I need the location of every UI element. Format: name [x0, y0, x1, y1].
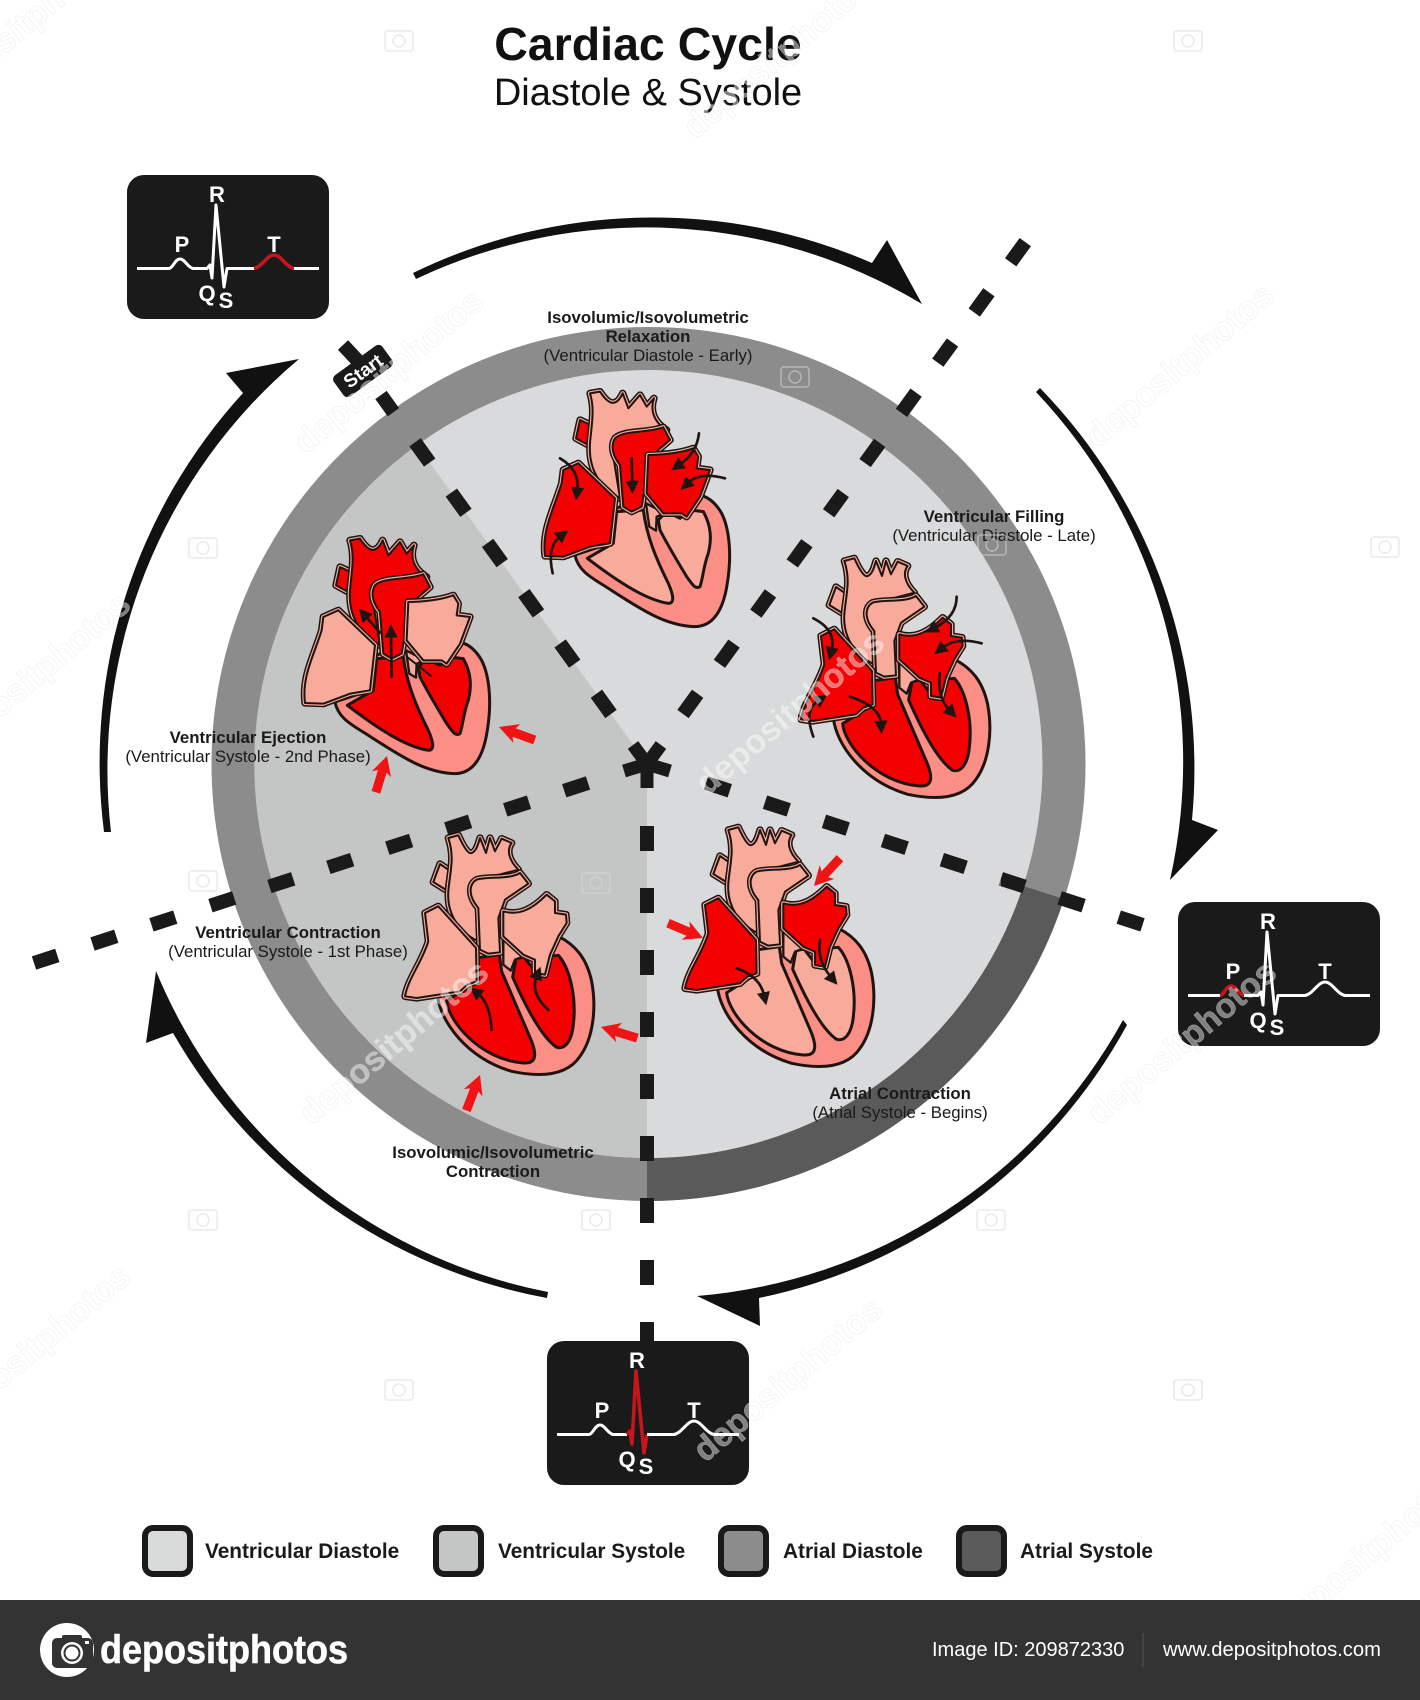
label: atrial contraction: Atrial Contraction: [829, 1084, 971, 1103]
footer logo text: depositphotos: [100, 1628, 348, 1672]
ECG panel: T wave highlighted: [127, 175, 329, 319]
legend: ventricular diastole: [145, 1528, 399, 1574]
icon: camera logo: [40, 1623, 94, 1677]
ECG panel: P wave highlighted: T: [1318, 959, 1332, 984]
dashed spokes: [34, 237, 1143, 1346]
label: atrial contraction: [812, 1084, 988, 1122]
ECG panel: P wave highlighted: S: [1270, 1015, 1284, 1040]
label: isovolumic relaxation: Isovolumic/Isovolumetric: [547, 308, 749, 327]
label: ventricular contraction: (Ventricular Systole - 1st Phase): [168, 942, 408, 961]
red arrow: [598, 1017, 640, 1048]
ECG panel: QRS highlighted: S: [639, 1454, 653, 1479]
inner sector: ventricular systole: [254, 445, 647, 1158]
footer bar: [0, 1600, 1420, 1700]
watermarks: depositphotos: [1080, 953, 1284, 1132]
heart: isovolumic relaxation: [544, 392, 730, 627]
label: ventricular filling: [892, 507, 1096, 545]
red arrow: [457, 1071, 489, 1114]
title: [494, 18, 802, 114]
label: ventricular ejection: Ventricular Ejection: [170, 728, 326, 747]
legend: atrial systole: Atrial Systole: [1020, 1540, 1153, 1563]
label: ventricular filling: (Ventricular Diastole - Late): [892, 526, 1096, 545]
watermarks: depositphotos: [287, 282, 491, 461]
website: www.depositphotos.com: [1162, 1639, 1381, 1661]
label: isovolumic contraction: Contraction: [446, 1162, 540, 1181]
legend: [145, 1528, 1153, 1574]
inner disc: ventricular diastole: [254, 370, 1042, 1158]
ECG panel: P wave highlighted: [1178, 902, 1380, 1046]
red arrow: [664, 914, 707, 947]
watermark cameras: [189, 31, 1399, 1400]
label: isovolumic contraction: [392, 1143, 594, 1181]
title: Cardiac Cycle: [494, 18, 802, 70]
label: ventricular contraction: [168, 923, 408, 961]
outer ring: atrial systole: [647, 886, 1064, 1201]
circular arrow: left: [100, 359, 299, 832]
red arrow: [496, 718, 538, 749]
label: ventricular ejection: [125, 728, 371, 766]
outer ring: atrial diastole: [212, 327, 1086, 1201]
legend: ventricular systole: Ventricular Systole: [498, 1540, 685, 1563]
legend: atrial systole: [959, 1528, 1153, 1574]
ECG panel: QRS highlighted: T: [687, 1398, 701, 1423]
ECG panel: T wave highlighted: Q: [198, 281, 216, 306]
circular arrow: right: [1036, 388, 1218, 880]
ECG panel: QRS highlighted: P: [595, 1398, 609, 1423]
label: ventricular filling: Ventricular Filling: [924, 507, 1064, 526]
heart: atrial contraction: [664, 827, 874, 1067]
legend: atrial diastole: Atrial Diastole: [783, 1540, 923, 1563]
label: isovolumic relaxation: [544, 308, 752, 365]
ECG panel: QRS highlighted: Q: [618, 1447, 636, 1472]
ECG panel: P wave highlighted: P: [1226, 959, 1240, 984]
ECG panel: T wave highlighted: R: [209, 182, 225, 207]
red arrow: [807, 851, 847, 893]
label: isovolumic relaxation: (Ventricular Diastole - Early): [544, 346, 752, 365]
label: isovolumic contraction: Isovolumic/Isovolumetric: [392, 1143, 594, 1162]
label: isovolumic relaxation: Relaxation: [606, 327, 690, 346]
ECG panel: P wave highlighted: R: [1260, 909, 1276, 934]
watermarks: depositphotos: [292, 953, 496, 1132]
title: Diastole & Systole: [494, 72, 802, 114]
red arrow: [366, 753, 397, 795]
start tag: [331, 343, 395, 399]
circular arrow: bottom left: [146, 971, 548, 1298]
heart: ventricular ejection: [304, 539, 538, 795]
ECG panel: QRS highlighted: R: [629, 1348, 645, 1373]
ECG panel: T wave highlighted: T: [267, 232, 281, 257]
label: atrial contraction: (Atrial Systole - Begins): [812, 1103, 988, 1122]
legend: atrial diastole: [721, 1528, 923, 1574]
cycle disc: [212, 327, 1086, 1201]
heart: ventricular filling: [801, 558, 990, 798]
watermarks: depositphotos: [688, 623, 892, 802]
image id: Image ID: 209872330: [932, 1639, 1124, 1661]
circular arrow: bottom right: [697, 1020, 1127, 1326]
ECG panel: T wave highlighted: S: [219, 288, 233, 313]
ECG panel: P wave highlighted: Q: [1249, 1008, 1267, 1033]
watermarks: depositphotos: [686, 1290, 890, 1469]
heart: ventricular contraction: [405, 835, 640, 1114]
ECG panel: QRS highlighted: [547, 1341, 749, 1485]
legend: ventricular systole: [436, 1528, 685, 1574]
legend: ventricular diastole: Ventricular Diastole: [205, 1540, 399, 1563]
start tag: Start: [340, 350, 388, 393]
label: ventricular contraction: Ventricular Contraction: [195, 923, 381, 942]
ECG panel: T wave highlighted: P: [175, 232, 189, 257]
watermarks: depositphotos: [1078, 276, 1282, 455]
label: ventricular ejection: (Ventricular Systole - 2nd Phase): [125, 747, 371, 766]
circular arrow: top: [413, 217, 922, 304]
